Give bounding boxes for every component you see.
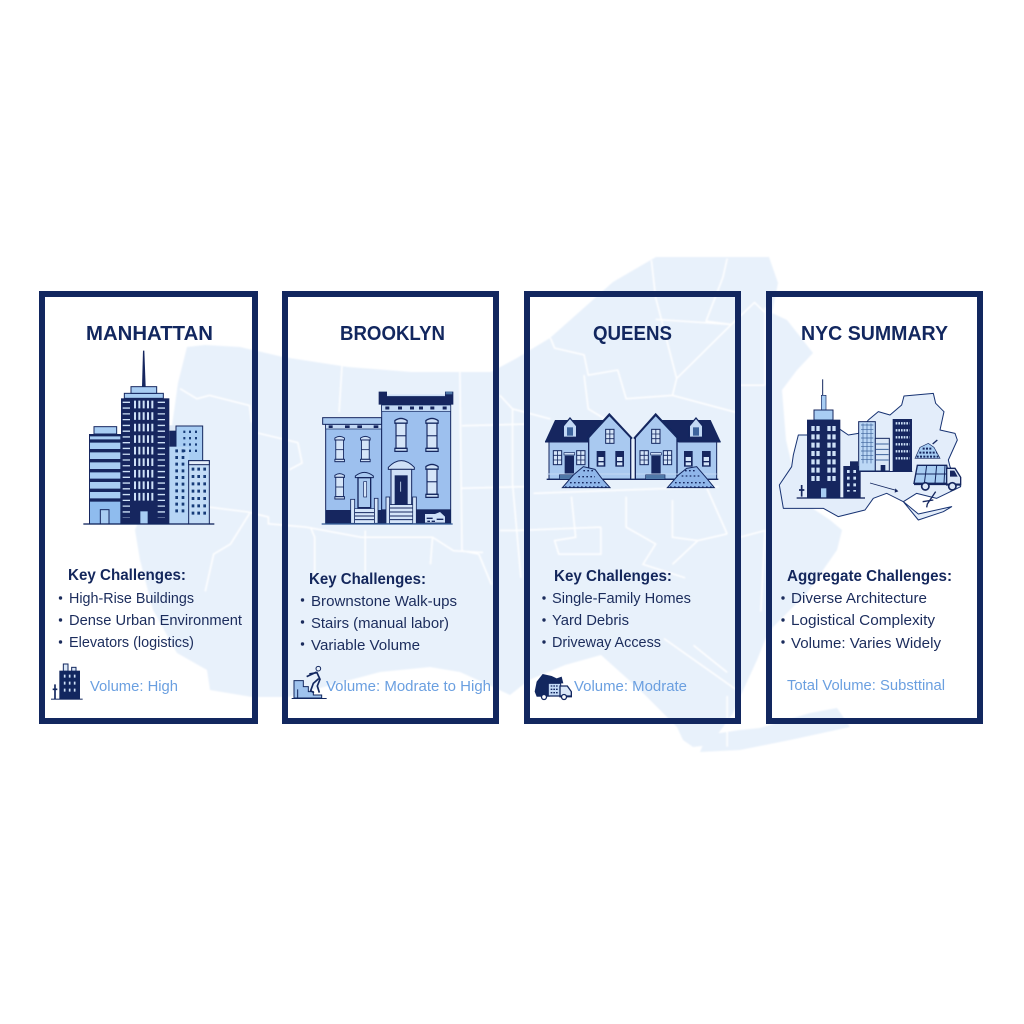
- icon: brownstones: [322, 392, 453, 525]
- panel: Brooklyn: [285, 294, 496, 721]
- icon: small building: [51, 664, 83, 700]
- heading: NYC Summary: NYC SUMMARY: [801, 323, 949, 345]
- heading: Queens: QUEENS: [593, 323, 672, 345]
- volume label: Volume: Modrate: [574, 678, 687, 695]
- list: challenges: Elevators (logistics): [69, 634, 194, 651]
- volume label: Volume: High: [90, 678, 178, 695]
- list: challenges: Driveway Access: [552, 634, 661, 651]
- panel: NYC Summary: [769, 294, 980, 721]
- list: challenges: [781, 590, 941, 652]
- list: challenges: Stairs (manual labor): [311, 615, 449, 632]
- list: challenges: Logistical Complexity: [791, 612, 936, 629]
- heading: aggregate challenges: Aggregate Challenges:: [787, 568, 952, 585]
- volume label: Volume: Modrate to High: [326, 678, 491, 695]
- icon: person on stairs: [292, 666, 327, 699]
- list: challenges: High-Rise Buildings: [69, 590, 194, 607]
- list: challenges: [59, 590, 243, 651]
- heading: key challenges: Key Challenges:: [68, 567, 186, 584]
- volume label: Total Volume: Substtinal: [787, 677, 945, 694]
- icon: NYC map with buildings and truck: [779, 379, 961, 520]
- list: challenges: [301, 593, 457, 654]
- heading: key challenges: Key Challenges:: [554, 568, 672, 585]
- icon: debris truck: [535, 674, 571, 699]
- list: challenges: [542, 590, 691, 651]
- panel: Manhattan: [42, 294, 255, 721]
- list: challenges: Single-Family Homes: [552, 590, 691, 607]
- background map of New York City: [135, 257, 850, 752]
- heading: key challenges: Key Challenges:: [309, 571, 426, 588]
- list: challenges: Variable Volume: [311, 637, 420, 654]
- list: challenges: Volume: Varies Widely: [791, 635, 941, 652]
- list: challenges: Dense Urban Environment: [69, 612, 243, 629]
- heading: Manhattan: MANHATTAN: [86, 323, 213, 345]
- icon: houses with debris piles: [545, 414, 721, 488]
- heading: Brooklyn: BROOKLYN: [340, 323, 445, 345]
- list: challenges: Yard Debris: [552, 612, 629, 629]
- icon: Manhattan skyscrapers: [83, 351, 214, 525]
- panel: Queens: [527, 294, 738, 721]
- list: challenges: Diverse Architecture: [791, 590, 927, 607]
- list: challenges: Brownstone Walk-ups: [311, 593, 457, 610]
